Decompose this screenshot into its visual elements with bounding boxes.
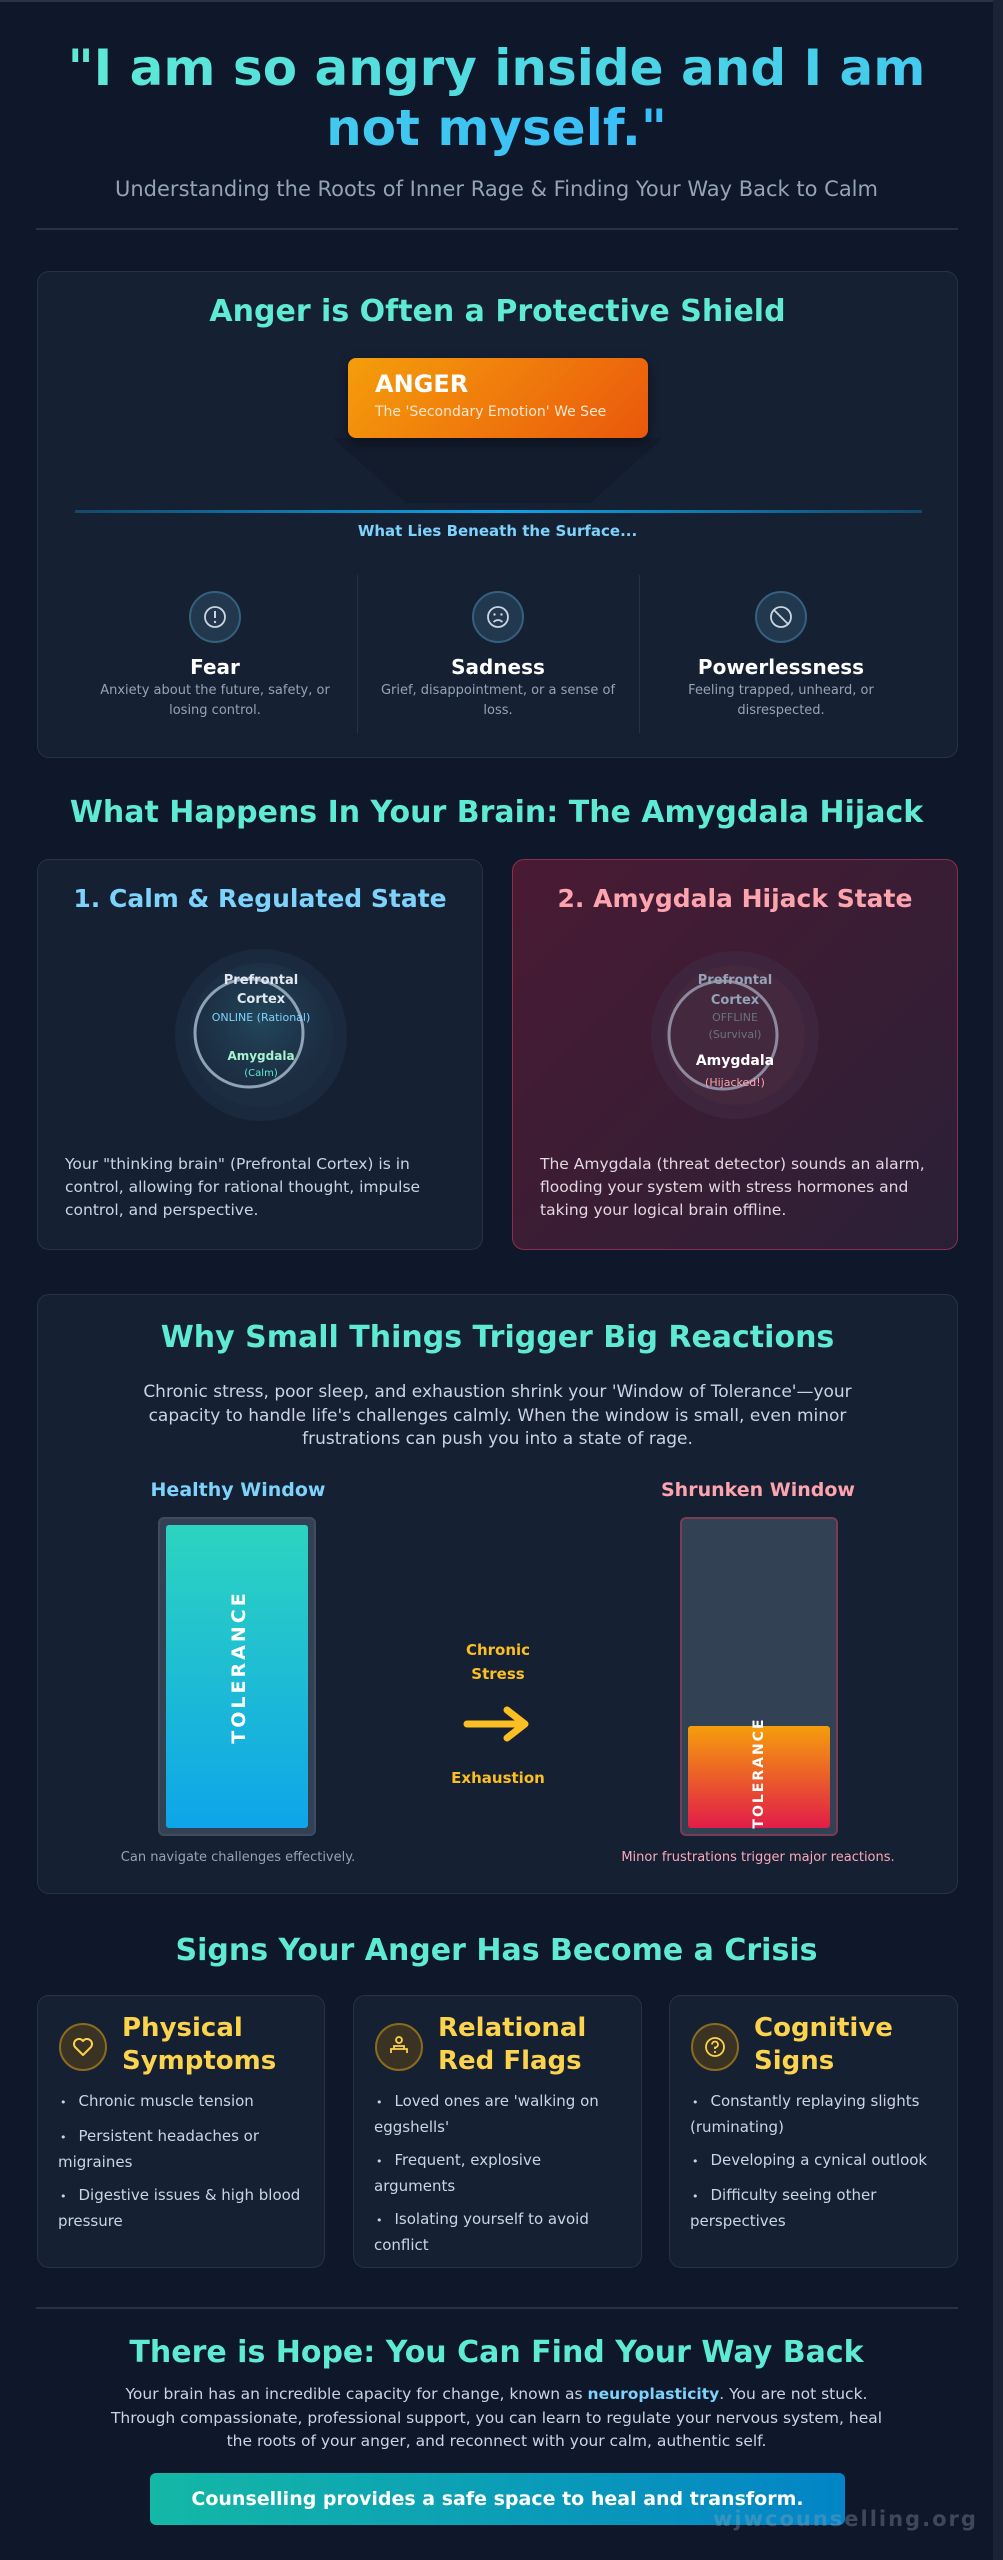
item: sadness: Sadness: [451, 655, 545, 679]
diagram: hijack brain: OFFLINE: [712, 1011, 758, 1024]
text: hope: Your brain has an incredible capacity for change, known as neuroplasticity. You are not stuck. Through compassionate, professional support, you can learn to regulate your nervous system, heal the roots of your anger, and reconnect with your calm, authentic self.: [111, 2385, 882, 2450]
heading: hijack: 2. Amygdala Hijack State: [558, 884, 912, 913]
icon: blocked: [755, 591, 807, 643]
title: relational: [438, 2013, 586, 2076]
list: cognitive: [690, 2092, 927, 2230]
icon: question: [691, 2023, 739, 2071]
panel: hijack state: [512, 859, 958, 1250]
item: fear: Anxiety about the future, safety, or: [100, 683, 330, 698]
list: physical: Digestive issues & high blood pressure: [58, 2186, 300, 2230]
item: sadness: loss.: [483, 703, 513, 718]
heading: calm: 1. Calm & Regulated State: [73, 884, 447, 913]
label: stress arrow: Chronic: [466, 1641, 530, 1659]
diagram: hijack brain: Cortex: [711, 993, 760, 1008]
item: powerlessness: disrespected.: [737, 703, 825, 718]
title: relational: Relational: [438, 2013, 586, 2043]
diagram: hijack brain: Prefrontal: [698, 973, 772, 988]
icon: people: [375, 2023, 423, 2071]
label: shrunken: Shrunken Window: [661, 1479, 855, 1501]
diagram: hijack brain: (Hijacked!): [705, 1076, 765, 1089]
text: calm description: Your "thinking brain" (Prefrontal Cortex) is in control, allowing for rational thought, impulse control, and perspective.: [65, 1155, 420, 1219]
callout: counselling button: [150, 2473, 845, 2525]
list: physical: Persistent headaches or migraines: [58, 2127, 259, 2171]
title: physical: Physical: [122, 2013, 243, 2043]
diagram: hijack brain: Amygdala: [696, 1053, 774, 1069]
card: physical: [37, 1995, 325, 2268]
diagram: calm brain: [175, 949, 347, 1121]
text: hijack description: The Amygdala (threat detector) sounds an alarm, flooding your system with stress hormones and taking your logical brain offline.: [540, 1155, 925, 1219]
subtitle: Understanding the Roots of Inner Rage & Finding Your Way Back to Calm: [115, 177, 878, 201]
diagram: hijack brain: [651, 951, 818, 1118]
icon: heart: [59, 2023, 107, 2071]
heading: signs: Signs Your Anger Has Become a Crisis: [176, 1933, 817, 1968]
title: not myself.": [326, 99, 667, 157]
diagram: calm brain: (Calm): [244, 1068, 278, 1079]
heading: hope: There is Hope: You Can Find Your Way Back: [129, 2335, 864, 2370]
diagram: calm brain: Cortex: [237, 992, 286, 1007]
title: cognitive: Cognitive: [754, 2013, 893, 2043]
list: cognitive: Constantly replaying slights (ruminating): [690, 2092, 919, 2136]
surface line: [75, 510, 922, 513]
bar: healthy window: TOLERANCE: [228, 1590, 250, 1744]
item: powerlessness: Powerlessness: [698, 655, 864, 679]
watermark: wjwcounselling.org: [713, 2507, 978, 2531]
item: fear: losing control.: [169, 703, 261, 718]
title: [68, 39, 925, 157]
list: relational: Loved ones are 'walking on eggshells': [374, 2092, 599, 2136]
caption: healthy: Can navigate challenges effectively.: [121, 1850, 355, 1865]
panel: window of tolerance: [37, 1294, 958, 1894]
title: cognitive: [754, 2013, 893, 2076]
item: fear: Fear: [190, 655, 240, 679]
list: physical: Chronic muscle tension: [78, 2092, 254, 2110]
anger box: [348, 358, 648, 438]
label: beneath surface: What Lies Beneath the Surface...: [358, 522, 637, 540]
title: "I am so angry inside and I am: [68, 39, 925, 97]
bar: shrunken window: [680, 1517, 838, 1836]
panel: protective shield: [37, 271, 958, 758]
item: powerlessness: Feeling trapped, unheard, or: [688, 683, 874, 698]
list: physical: [58, 2092, 300, 2230]
bar: shrunken window: TOLERANCE: [751, 1717, 767, 1829]
title: cognitive: Signs: [754, 2046, 834, 2076]
heading: brain: What Happens In Your Brain: The Amygdala Hijack: [70, 795, 923, 830]
list: relational: Frequent, explosive arguments: [374, 2151, 541, 2195]
diagram: calm brain: ONLINE (Rational): [212, 1011, 310, 1024]
icon: exclamation: [189, 591, 241, 643]
text: explanation: Chronic stress, poor sleep, and exhaustion shrink your 'Window of Tolerance'—your capacity to handle life's challenges calmly. When the window is small, even minor frustrations can push you into a state of rage.: [143, 1382, 852, 1449]
icon: sad face: [472, 591, 524, 643]
list: cognitive: Difficulty seeing other perspectives: [690, 2186, 876, 2230]
card: cognitive: [669, 1995, 958, 2268]
diagram: calm brain: Amygdala: [227, 1049, 295, 1063]
callout: counselling button: Counselling provides a safe space to heal and transform.: [191, 2488, 804, 2510]
item: sadness: Grief, disappointment, or a sense of: [381, 683, 615, 698]
bar: healthy window: [158, 1517, 316, 1836]
card: relational: [353, 1995, 642, 2268]
item: powerlessness: [688, 591, 874, 718]
label: stress arrow: Stress Exhaustion: [451, 1665, 545, 1787]
panel: calm state: [37, 859, 483, 1250]
label: healthy: Healthy Window: [151, 1479, 325, 1501]
item: sadness: [381, 591, 616, 718]
anger box: The 'Secondary Emotion' We See: [375, 404, 606, 420]
title: physical: Symptoms: [122, 2046, 276, 2076]
item: fear: [100, 591, 330, 718]
heading: small things: Why Small Things Trigger Big Reactions: [161, 1320, 834, 1355]
title: physical: [122, 2013, 276, 2076]
title: relational: Red Flags: [438, 2046, 582, 2076]
diagram: calm brain: Prefrontal: [224, 973, 298, 988]
list: relational: [374, 2092, 599, 2254]
list: cognitive: Developing a cynical outlook: [710, 2151, 927, 2169]
funnel shape: [333, 438, 663, 503]
diagram: hijack brain: (Survival): [709, 1028, 761, 1041]
list: relational: Isolating yourself to avoid conflict: [374, 2210, 589, 2254]
anger box: ANGER: [375, 370, 468, 398]
caption: shrunken: Minor frustrations trigger major reactions.: [621, 1850, 895, 1865]
heading: shield: Anger is Often a Protective Shield: [209, 294, 786, 329]
